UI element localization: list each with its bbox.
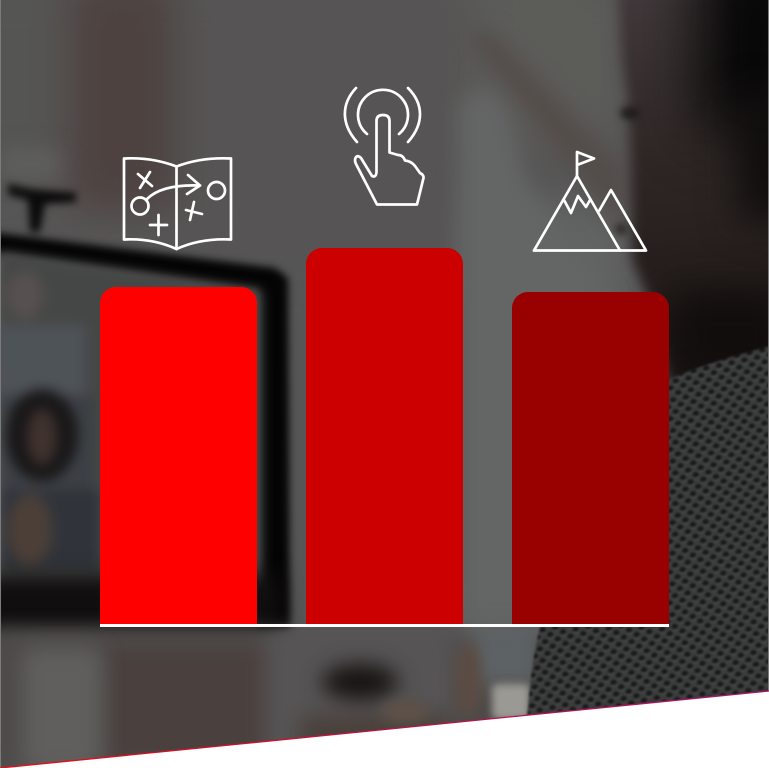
monitor screen: video tiles — [0, 252, 262, 600]
white bottom wedge — [0, 691, 769, 768]
icon: tapping hand — [345, 88, 424, 204]
bar chart — [100, 248, 669, 627]
webcam light surroundings — [10, 156, 54, 190]
icon: strategy map — [124, 158, 231, 249]
bar 1 — [100, 287, 257, 625]
desk foreground — [0, 627, 550, 768]
baseline — [100, 624, 669, 627]
sweater — [526, 346, 768, 714]
wall and window — [58, 0, 624, 292]
head in profile — [615, 0, 769, 385]
icon: mountain with flag — [534, 152, 646, 250]
bar 2 — [306, 248, 463, 625]
monitor — [0, 182, 290, 628]
bar 3 — [512, 292, 669, 625]
